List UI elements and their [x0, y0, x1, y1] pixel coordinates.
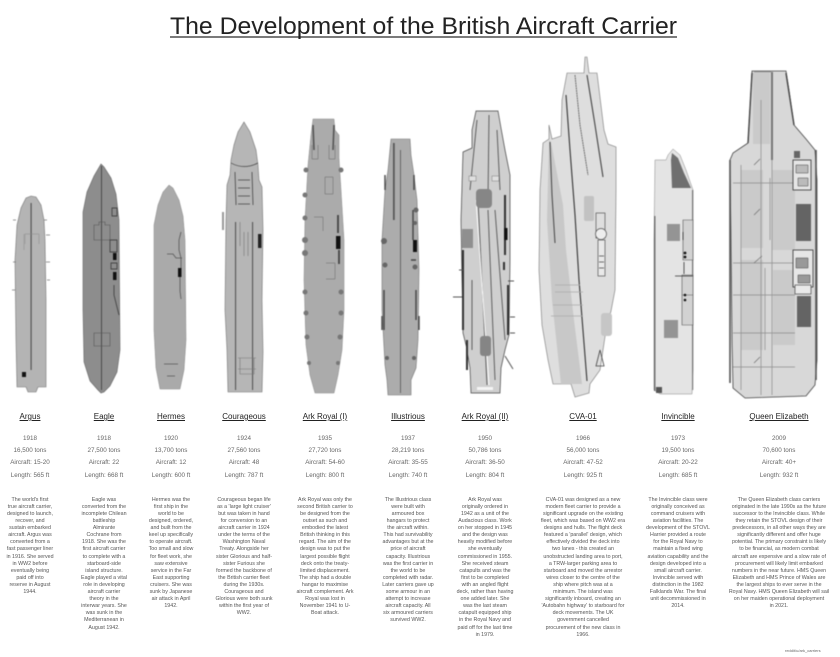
- column: CVA-01: designs and hulls. The flight deck: [544, 525, 622, 531]
- column: Argus: in 1916. She served: [6, 554, 54, 560]
- column: Courageous: during the 1930s.: [224, 582, 264, 588]
- column: Illustrious: Illustrious: [391, 412, 425, 421]
- column: Invincible: originally conceived as: [651, 504, 705, 510]
- column: Illustrious: price of aircraft: [390, 546, 426, 552]
- ship: CVA-01: [539, 57, 616, 397]
- column: CVA-01: CVA-01: [569, 412, 597, 421]
- column: Courageous: Courageous and: [224, 589, 264, 595]
- column: Illustrious: This had survivability: [383, 532, 433, 538]
- column: Hermes: Hermes: [157, 412, 185, 421]
- column: Ark Royal II: 50,786 tons: [469, 447, 501, 454]
- column: Hermes: Too small and slow: [149, 546, 193, 552]
- column: Eagle: island structure.: [85, 568, 123, 574]
- column: Hermes: Hermes was the: [152, 497, 190, 503]
- column: Queen Elizabeth: The Queen Elizabeth class carriers: [738, 497, 820, 503]
- column: Eagle: Cochrane from: [86, 532, 122, 538]
- column: Illustrious: hangars to protect: [387, 518, 429, 524]
- column: Ark Royal I: design was to put the: [300, 546, 350, 552]
- column: Argus: converted from a: [10, 539, 50, 545]
- column: CVA-01: featured a 'parallel' design, which: [544, 532, 622, 538]
- column: Ark Royal II: Length: 804 ft: [466, 472, 504, 479]
- column: Hermes: 1920: [164, 435, 178, 442]
- column: Hermes: 1942.: [164, 603, 178, 609]
- column: Courageous: WW2.: [237, 610, 251, 616]
- column: Illustrious: were built with: [391, 504, 425, 510]
- column: Ark Royal II: commissioned in 1955.: [458, 554, 512, 560]
- column: Illustrious: armoured box: [392, 511, 424, 517]
- column: Eagle: battleship: [93, 518, 115, 524]
- column: CVA-01: starboard and moved the arrestor: [544, 568, 622, 574]
- column: Ark Royal II: on her stopped in 1945: [458, 525, 512, 531]
- ship: Ark Royal II: [453, 111, 515, 393]
- column: Invincible: Invincible served with: [653, 575, 703, 581]
- column: Queen Elizabeth: Length: 932 ft: [760, 472, 798, 479]
- title: The Development of the British Aircraft Carrier: [170, 13, 677, 40]
- column: Illustrious: Length: 740 ft: [389, 472, 427, 479]
- column: Hermes: East supporting: [153, 575, 189, 581]
- column: Ark Royal II: and the design was: [462, 532, 508, 538]
- column: CVA-01: procurement of the new class in: [546, 624, 620, 630]
- column: Courageous: the British carrier fleet: [218, 575, 270, 581]
- column: Queen Elizabeth: significantly different and offer huge: [737, 532, 821, 538]
- column: Ark Royal II: catapults and was the: [459, 568, 511, 574]
- column: Eagle: starboard-side: [87, 561, 121, 567]
- column: Illustrious: survived WW2.: [390, 617, 426, 623]
- column: CVA-01: government cancelled: [557, 617, 609, 623]
- column: Illustrious: some armour in an: [386, 589, 430, 595]
- column: Hermes: cruisers. She was: [150, 582, 192, 588]
- column: Invincible: design developed into a: [650, 561, 706, 567]
- column: Argus: true aircraft carrier,: [8, 504, 52, 510]
- column: Illustrious: attempt to increase: [385, 596, 431, 602]
- column: Eagle: 27,500 tons: [88, 447, 120, 454]
- column: Argus: 1918: [23, 435, 37, 442]
- column: Illustrious: 1937: [401, 435, 415, 442]
- column: CVA-01: CVA-01 was designed as a new: [546, 497, 620, 503]
- column: Invincible: Length: 685 ft: [659, 472, 697, 479]
- column: Ark Royal II: originally ordered in: [462, 504, 508, 510]
- column: CVA-01: significant upgrade on the existing: [543, 511, 623, 517]
- column: Courageous: sister Glorious and half-: [216, 554, 272, 560]
- column: Ark Royal II: she eventually: [468, 546, 502, 552]
- column: Illustrious: the aircraft within.: [387, 525, 429, 531]
- column: Hermes: [148, 412, 194, 609]
- column: Queen Elizabeth: on her maiden operational deployment: [734, 596, 824, 602]
- column: Argus: reserve in August: [10, 582, 50, 588]
- column: Queen Elizabeth: Elizabeth and HMS Prince of Wales are: [733, 575, 825, 581]
- column: Hermes: to operate aircraft.: [150, 539, 192, 545]
- column: Argus: [6, 412, 54, 595]
- column: Invincible: Harrier provided a route: [650, 532, 706, 538]
- column: Ark Royal I: second British carrier to: [297, 504, 353, 510]
- column: Ark Royal I: The ship had a double: [299, 575, 351, 581]
- column: Eagle: aircraft carrier: [88, 589, 120, 595]
- column: Queen Elizabeth: 70,600 tons: [763, 447, 795, 454]
- column: Invincible: 2014.: [671, 603, 685, 609]
- column: Ark Royal I: Ark Royal was only the: [298, 497, 352, 503]
- column: Ark Royal II: Ark Royal (II): [462, 412, 508, 421]
- column: Ark Royal I: Ark Royal (I): [303, 412, 347, 421]
- column: Eagle: theory in the: [89, 596, 119, 602]
- column: Queen Elizabeth: 2009: [772, 435, 786, 442]
- column: Ark Royal II: in the Royal Navy and: [459, 617, 511, 623]
- column: Ark Royal II: Ark Royal was: [468, 497, 502, 503]
- column: Illustrious: 28,219 tons: [392, 447, 424, 454]
- column: Argus: The world's first: [12, 497, 48, 503]
- column: Courageous: sister Furious she: [223, 561, 265, 567]
- column: Illustrious: the world to be: [391, 568, 425, 574]
- column: Illustrious: capacity. Illustrious: [386, 554, 430, 560]
- column: Invincible: development of the STOVL: [646, 525, 710, 531]
- column: Ark Royal II: She received steam: [462, 561, 508, 567]
- column: Courageous: Courageous began life: [217, 497, 271, 503]
- column: Ark Royal I: British thinking in this: [300, 532, 350, 538]
- column: Eagle: role in developing: [83, 582, 125, 588]
- column: CVA-01: Length: 925 ft: [564, 472, 602, 479]
- column: Queen Elizabeth: potential. The primary constraint is likely: [732, 539, 826, 545]
- column: Courageous: under the terms of the: [218, 532, 270, 538]
- column: Invincible: aviation facilities. The: [653, 518, 703, 524]
- column: Argus: eventually being: [11, 568, 49, 574]
- column: Hermes: Length: 600 ft: [152, 472, 190, 479]
- column: Invincible: 19,500 tons: [662, 447, 694, 454]
- ship: Invincible: [654, 149, 693, 394]
- column: Eagle: [81, 412, 127, 630]
- column: Argus: 16,500 tons: [14, 447, 46, 454]
- column: Ark Royal II: in 1979.: [476, 632, 494, 638]
- column: Queen Elizabeth: Royal Navy. HMS Queen Elizabeth will sail: [729, 589, 829, 595]
- column: Argus: aircraft. Argus was: [8, 532, 52, 538]
- column: Illustrious: The Illustrious class: [385, 497, 431, 503]
- column: Eagle: Length: 668 ft: [85, 472, 123, 479]
- column: Invincible: maintain a fixed wing: [653, 546, 703, 552]
- column: Argus: Length: 565 ft: [11, 472, 49, 479]
- column: Courageous: Length: 787 ft: [225, 472, 263, 479]
- ship: Argus: [12, 196, 50, 392]
- column: CVA-01: fleet, which was based on WW2 era: [541, 518, 625, 524]
- column: Hermes: and built from the: [151, 525, 191, 531]
- column: Eagle: Eagle was: [92, 497, 116, 503]
- column: Ark Royal II: Aircraft: 36-50: [465, 459, 505, 466]
- column: Courageous: Treaty. Alongside her: [219, 546, 269, 552]
- column: Ark Royal II: 1942 as a unit of the: [461, 511, 509, 517]
- column: CVA-01: significantly inboard, creating an: [545, 596, 621, 602]
- column: Invincible: The Invincible class were: [648, 497, 708, 503]
- column: Ark Royal I: regard. The aim of the: [299, 539, 351, 545]
- column: Courageous: Washington Naval: [223, 539, 265, 545]
- column: Ark Royal I: [296, 412, 354, 616]
- column: Eagle: 1918: [97, 435, 111, 442]
- column: Ark Royal II: with an angled flight: [462, 582, 508, 588]
- column: Ark Royal II: heavily modified before: [458, 539, 512, 545]
- column: Queen Elizabeth: successor to the Invincible class. While: [733, 511, 825, 517]
- column: Invincible: 1973: [671, 435, 685, 442]
- column: Illustrious: advantages but at the: [383, 539, 433, 545]
- column: Eagle: interwar years. She: [81, 603, 127, 609]
- column: Queen Elizabeth: aircraft are expensive and a slow rate of: [732, 554, 826, 560]
- column: Eagle: Eagle played a vital: [81, 575, 127, 581]
- column: Ark Royal II: 1950: [478, 435, 492, 442]
- column: Queen Elizabeth: originated in the late 1990s as the future: [732, 504, 826, 510]
- column: Courageous: Glorious were both sunk: [215, 596, 273, 602]
- column: Invincible: small aircraft carrier.: [654, 568, 702, 574]
- column: Eagle: Mediterranean in: [84, 617, 124, 623]
- column: Hermes: first ship in the: [154, 504, 188, 510]
- column: Ark Royal II: was the last steam: [463, 603, 507, 609]
- column: Ark Royal I: Royal was lost in: [305, 596, 345, 602]
- column: Argus: sustain embarked: [9, 525, 51, 531]
- column: CVA-01: 1966: [576, 435, 590, 442]
- column: Invincible: command cruisers with: [651, 511, 705, 517]
- ship: Ark Royal I: [302, 119, 344, 393]
- column: CVA-01: deck movements. The UK: [553, 610, 613, 616]
- column: Ark Royal II: one added later. She: [461, 596, 509, 602]
- column: Illustrious: was the first carrier in: [383, 561, 433, 567]
- column: CVA-01: ship where pitch was at a: [553, 582, 613, 588]
- column: Argus: 1944.: [23, 589, 37, 595]
- column: Ark Royal I: outset as such and: [303, 518, 347, 524]
- ship plan drawings: [12, 56, 818, 400]
- column: Hermes: air attack in April: [152, 596, 190, 602]
- column: Eagle: to complete with a: [83, 554, 125, 560]
- column: Ark Royal I: Boat attack.: [311, 610, 339, 616]
- column: Ark Royal II: catapult equipped ship: [458, 610, 512, 616]
- column: CVA-01: 1966.: [576, 632, 590, 638]
- column: Courageous: Aircraft: 48: [229, 459, 259, 466]
- column: Illustrious: Later carriers gave up: [382, 582, 434, 588]
- column: Illustrious: [382, 412, 434, 623]
- column: Argus: in WW2 before: [12, 561, 48, 567]
- column: Ark Royal I: deck onto the treaty-: [301, 561, 349, 567]
- column: Eagle: first aircraft carrier: [83, 546, 125, 552]
- column: Courageous: Courageous: [222, 412, 266, 421]
- column: Illustrious: completed with radar.: [383, 575, 433, 581]
- column: Invincible: for the Royal Navy to: [653, 539, 703, 545]
- column: CVA-01: minimum. The island was: [553, 589, 613, 595]
- column: Argus: Argus: [20, 412, 40, 421]
- column: Hermes: Aircraft: 12: [156, 459, 186, 466]
- column: CVA-01: 56,000 tons: [567, 447, 599, 454]
- column: Courageous: but was taken in hand: [218, 511, 270, 517]
- column: CVA-01: 'Autobahn highway' to starboard for: [541, 603, 624, 609]
- ship: Eagle: [83, 164, 120, 393]
- column: Eagle: converted from the: [82, 504, 126, 510]
- column: Ark Royal II: [456, 412, 514, 638]
- column: CVA-01: [540, 412, 626, 638]
- column: CVA-01: modern fleet carrier to provide a: [545, 504, 621, 510]
- column: Eagle: August 1942.: [88, 624, 120, 630]
- column: Ark Royal I: largest possible flight: [300, 554, 350, 560]
- column: Illustrious: Aircraft: 35-55: [388, 459, 428, 466]
- column: Ark Royal I: Aircraft: 54-60: [305, 459, 345, 466]
- column: Hermes: for fleet work, she: [150, 554, 192, 560]
- ship: Hermes: [154, 185, 186, 389]
- column: CVA-01: effectively divided the deck into: [546, 539, 620, 545]
- column: CVA-01: wires closer to the centre of the: [546, 575, 620, 581]
- column: Ark Royal I: hangar to maximise: [302, 582, 348, 588]
- column: Courageous: within the first year of: [219, 603, 269, 609]
- column: Courageous: formed the backbone of: [216, 568, 272, 574]
- column: Ark Royal II: paid off for the last time: [458, 624, 512, 630]
- column: Courageous: as a 'large light cruiser': [217, 504, 271, 510]
- column: Ark Royal I: aircraft complement. Ark: [296, 589, 354, 595]
- column: Invincible: [646, 412, 710, 609]
- column: Courageous: [215, 412, 273, 616]
- column: Invincible: Aircraft: 20-22: [658, 459, 698, 466]
- column: Courageous: for conversion to an: [221, 518, 267, 524]
- column: Ark Royal I: November 1941 to U-: [300, 603, 350, 609]
- column: Invincible: Invincible: [661, 412, 695, 421]
- column: Argus: recover, and: [15, 518, 45, 524]
- column: Hermes: saw extensive: [154, 561, 188, 567]
- column: CVA-01: unobstructed landing area to port,: [543, 554, 623, 560]
- column: Hermes: 13,700 tons: [155, 447, 187, 454]
- column: Ark Royal I: be designed from the: [300, 511, 350, 517]
- column: Ark Royal I: Length: 800 ft: [306, 472, 344, 479]
- column: Eagle: Aircraft: 22: [89, 459, 119, 466]
- column: Hermes: keel up specifically: [149, 532, 193, 538]
- column: Illustrious: six armoured carriers: [383, 610, 433, 616]
- column: Queen Elizabeth: numbers in the near future. HMS Queen: [732, 568, 826, 574]
- column: Hermes: sunk by Japanese: [150, 589, 192, 595]
- column: Invincible: Falklands War. The final: [650, 589, 706, 595]
- column: Courageous: 1924: [237, 435, 251, 442]
- column: Queen Elizabeth: [729, 412, 829, 609]
- column: Argus: designed to launch,: [7, 511, 53, 517]
- column: Queen Elizabeth: Queen Elizabeth: [749, 412, 809, 421]
- column: Invincible: unit decommissioned in: [650, 596, 706, 602]
- ship: Illustrious: [381, 139, 419, 395]
- column: Queen Elizabeth: Aircraft: 40+: [762, 459, 796, 466]
- column: Eagle: incomplete Chilean: [81, 511, 127, 517]
- column: Ark Royal I: 1935: [318, 435, 332, 442]
- column: Hermes: world to be: [158, 511, 184, 517]
- column: Queen Elizabeth: to be financial, as modern combat: [739, 546, 819, 552]
- column: Argus: paid off into: [16, 575, 44, 581]
- column: Eagle: Almirante: [93, 525, 115, 531]
- ship: Queen Elizabeth: [730, 71, 817, 398]
- column: Courageous: aircraft carrier in 1924: [218, 525, 270, 531]
- column: Queen Elizabeth: the largest ships to ever serve in the: [736, 582, 822, 588]
- column: Queen Elizabeth: procurement will likely limit embarked: [735, 561, 823, 567]
- column: Illustrious: aircraft capacity. All: [385, 603, 431, 609]
- column: Ark Royal II: Audacious class. Work: [458, 518, 512, 524]
- column: Invincible: aviation capability and the: [648, 554, 708, 560]
- column: Eagle: was sunk in the: [86, 610, 122, 616]
- column: Queen Elizabeth: predecessors, in all other ways they are: [732, 525, 826, 531]
- column: CVA-01: Aircraft: 47-52: [563, 459, 603, 466]
- column: Queen Elizabeth: in 2021.: [770, 603, 788, 609]
- column: Hermes: service in the Far: [151, 568, 191, 574]
- column: CVA-01: two lanes - this created an: [552, 546, 614, 552]
- column: Eagle: 1918. She was the: [82, 539, 126, 545]
- ship: Courageous: [222, 122, 263, 392]
- column: Hermes: designed, ordered,: [149, 518, 193, 524]
- column: Argus: fast passenger liner: [7, 546, 53, 552]
- footer credit: reddit/u/ark_carriers: [785, 648, 821, 653]
- column: CVA-01: a TRW-larger parking area to: [549, 561, 617, 567]
- column: Ark Royal II: first to be completed: [461, 575, 509, 581]
- column: Queen Elizabeth: they retain the STOVL design of their: [736, 518, 822, 524]
- column: Argus: Aircraft: 15-20: [10, 459, 50, 466]
- column: Invincible: distinction in the 1982: [652, 582, 704, 588]
- column: Courageous: 27,560 tons: [228, 447, 260, 454]
- column: Ark Royal I: 27,720 tons: [309, 447, 341, 454]
- column: Ark Royal II: deck, rather than having: [457, 589, 513, 595]
- column: Ark Royal I: limited displacement.: [300, 568, 350, 574]
- column: Ark Royal I: embodied the latest: [302, 525, 348, 531]
- column: Eagle: Eagle: [94, 412, 114, 421]
